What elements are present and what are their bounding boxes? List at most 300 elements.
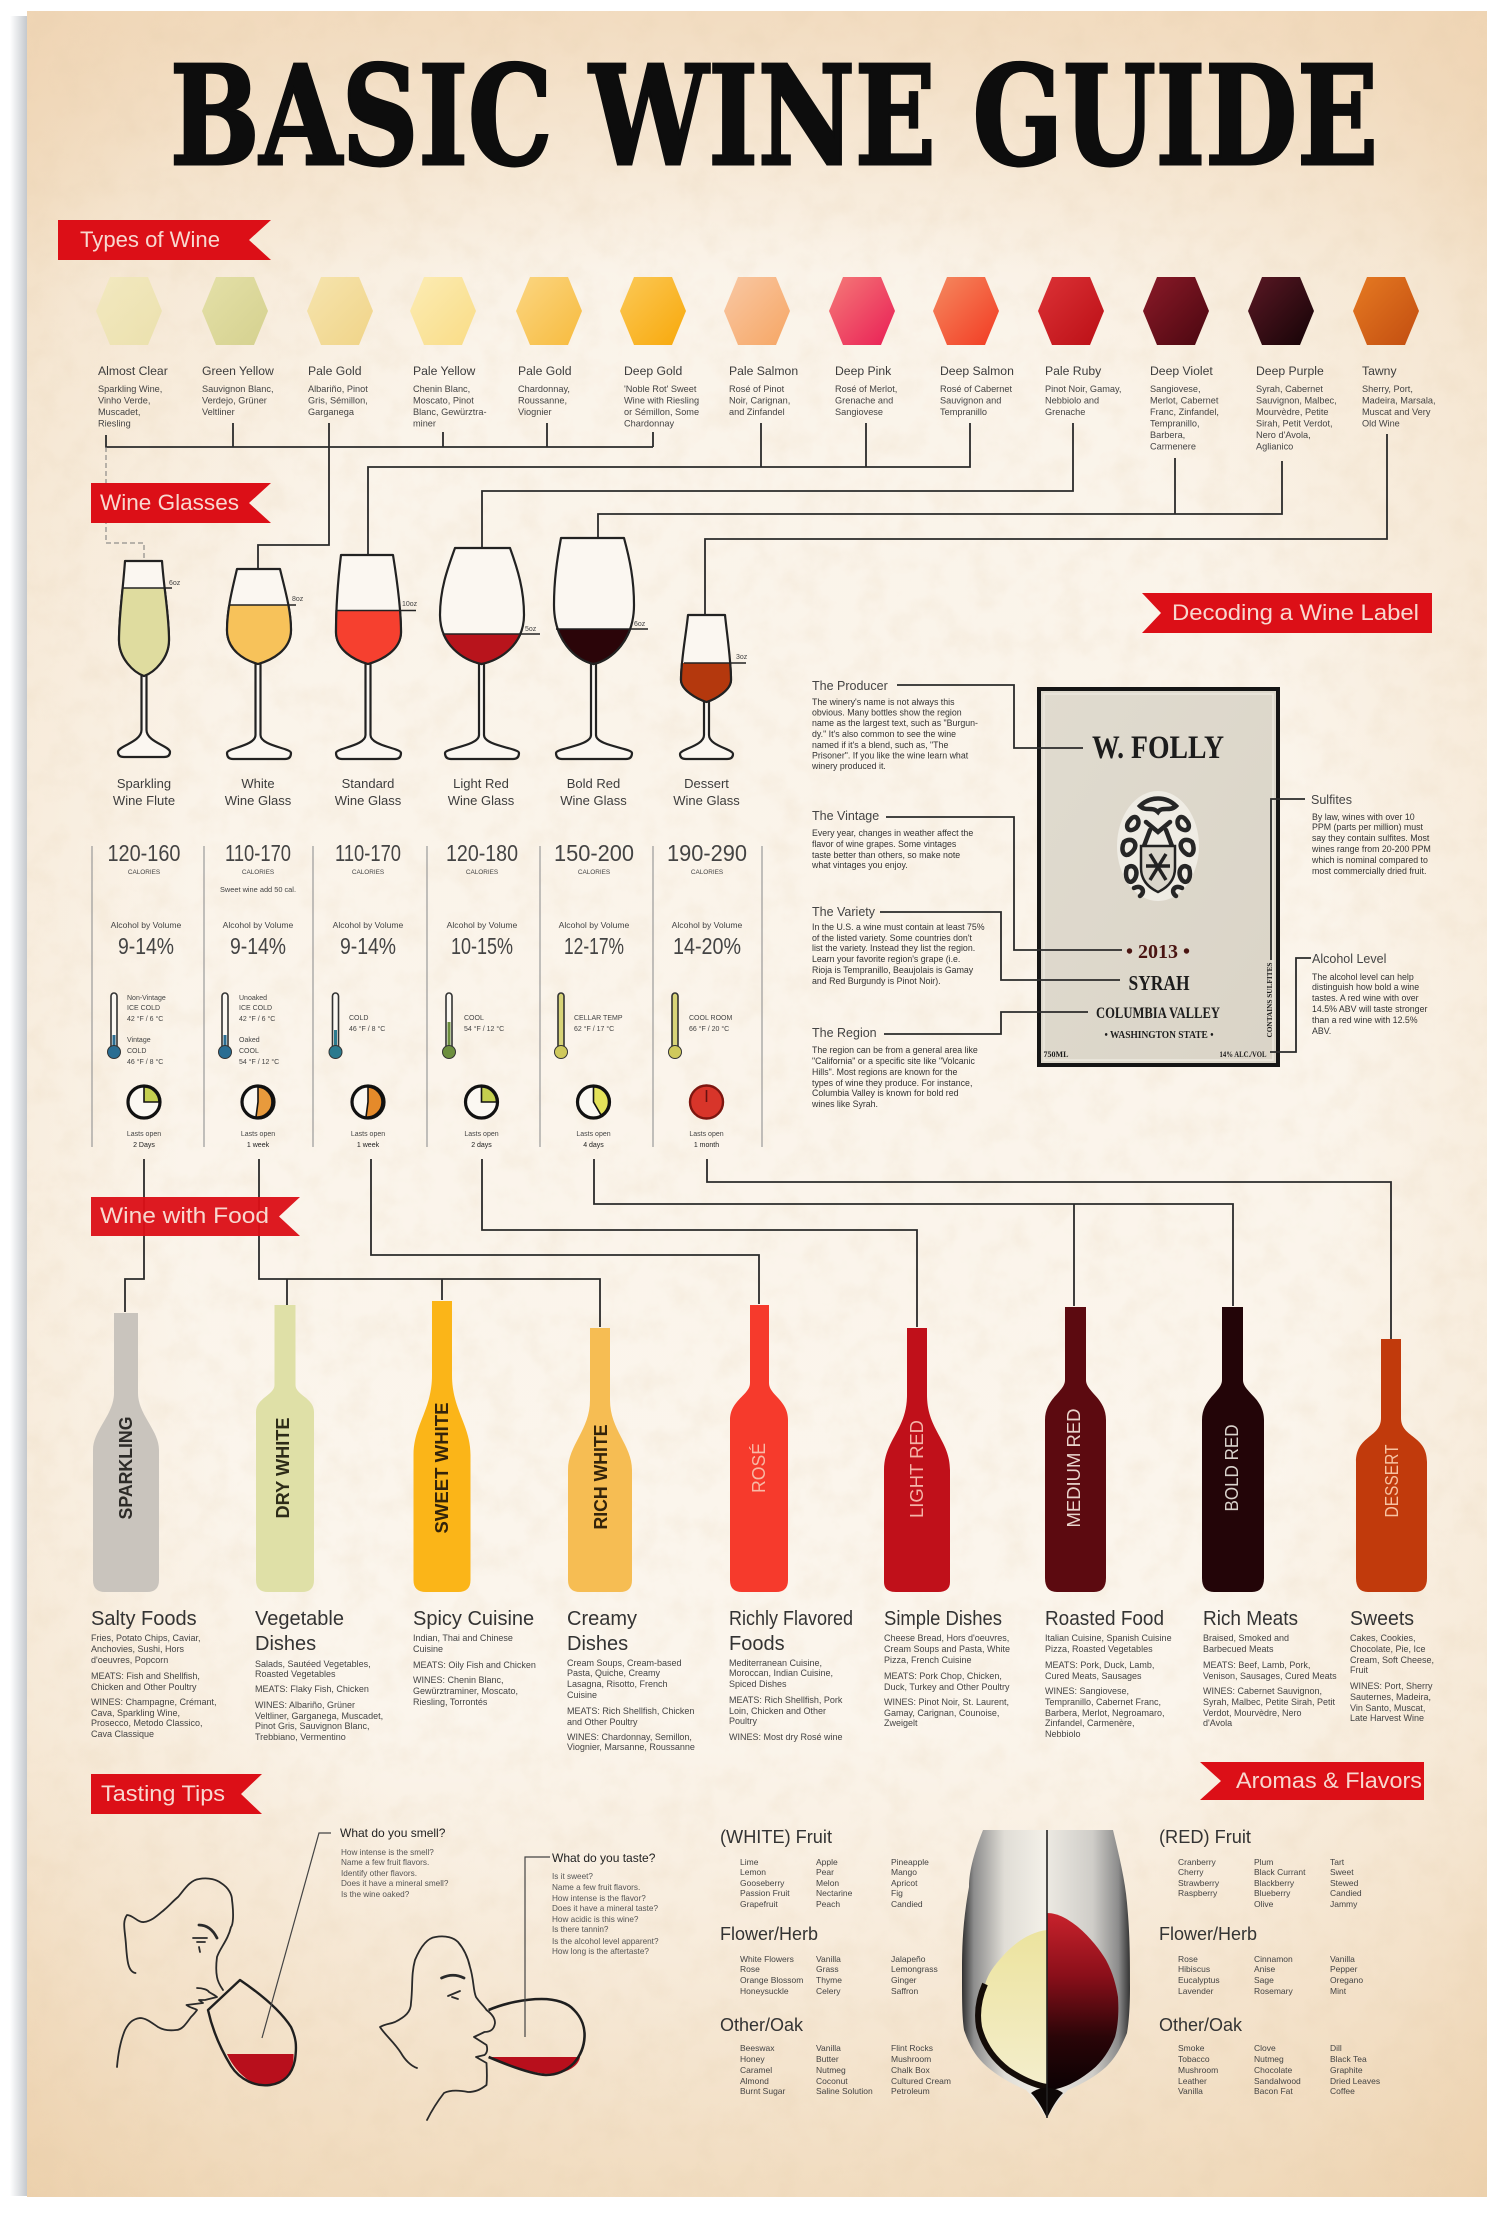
wine colour descriptions: Almost Clear (98, 364, 168, 378)
pairing: simple dishes: Cheese Bread, Hors d'oeuvres, (884, 1633, 1009, 1643)
aroma lists: red wine: Blueberry (1254, 1888, 1291, 1898)
wine colour descriptions: Vinho Verde, (98, 396, 150, 406)
illustration: person smelling wine (117, 1878, 233, 2067)
aroma lists: white wine: Beeswax (740, 2043, 775, 2053)
pairing: creamy dishes: Dishes (567, 1633, 628, 1655)
text: what do you taste: Is there tannin? (552, 1925, 609, 1934)
clocks: how long wine lasts open: 4 days (583, 1142, 604, 1149)
wine colour descriptions: Sangiovese (835, 407, 883, 417)
pairing: sweets: Late Harvest Wine (1350, 1713, 1424, 1723)
pairing: sweets: Chocolate, Pie, Ice (1350, 1644, 1426, 1654)
thermometers: COLD (127, 1048, 146, 1055)
calories figures: CALORIES (242, 869, 274, 876)
aroma lists: white wine: Chalk Box (891, 2065, 930, 2075)
wine label illustration: W. FOLLY (1092, 730, 1224, 766)
text: what do you taste: Is it sweet? (552, 1872, 593, 1881)
pairing: creamy dishes: and Other Poultry (567, 1717, 638, 1727)
wine colour descriptions: Grenache (1045, 407, 1085, 417)
wine colour descriptions: Wine with Riesling (624, 396, 699, 406)
pairing: vegetable dishes: WINES: Albariño, Grüner (255, 1700, 355, 1710)
aroma lists: white wine: Flower/Herb (720, 1924, 818, 1944)
pairing: rich meats: Rich Meats (1203, 1608, 1298, 1630)
aroma lists: white wine: Gooseberry (740, 1878, 785, 1888)
callout: sulfites: Sulfites (1311, 793, 1352, 807)
thermometers: 42 °F / 6 °C (239, 1015, 275, 1023)
aroma lists: red wine: Coffee (1330, 2086, 1355, 2096)
leader line: taste (525, 1857, 550, 2037)
callout: the region: "California" or a specific site like "Volcanic (812, 1056, 975, 1066)
callout: the region: Columbia Valley is known for bold red (812, 1088, 959, 1098)
thermometers: COOL (464, 1015, 484, 1022)
thermometers: 54 °F / 12 °C (464, 1025, 504, 1033)
pairing: simple dishes (884, 1608, 1010, 1728)
thermometers (108, 993, 732, 1066)
banner: tasting tips (91, 1774, 262, 1814)
pairing: salty foods: d'oeuvres, Popcorn (91, 1655, 168, 1665)
bottle: sweet white (414, 1301, 470, 1592)
pairing: spicy cuisine: WINES: Chenin Blanc, (413, 1675, 504, 1685)
callout: alcohol level: The alcohol level can help (1312, 972, 1414, 982)
pairing: rich meats: Verdot, Mourvèdre, Nero (1203, 1708, 1302, 1718)
pairing: salty foods (91, 1608, 217, 1739)
aroma lists: red wine: Oregano (1330, 1975, 1363, 1985)
glass: white wine: 8oz (292, 596, 304, 603)
aroma lists: white wine: Orange Blossom (740, 1975, 803, 1985)
aroma lists: red wine: Plum (1254, 1857, 1273, 1867)
callout: sulfites (1311, 793, 1431, 876)
callout: the variety: Learn your favorite region's grape (i.e. (812, 954, 960, 964)
callout: the vintage: flavor of wine grapes. Some vintages (812, 839, 957, 849)
pairing: rich meats: Venison, Sausages, Cured Meats (1203, 1671, 1337, 1681)
glass names: Standard (342, 776, 394, 791)
glass names: Dessert (684, 776, 729, 791)
banner: wine with food: Wine with Food (100, 1203, 269, 1228)
bottle: sparkling (93, 1313, 159, 1592)
alcohol by volume figures: 9-14% (340, 933, 396, 959)
aroma lists: white wine: Nutmeg (816, 2065, 846, 2075)
aroma lists: red wine: Clove (1254, 2043, 1276, 2053)
bottle: dessert: DESSERT (1382, 1444, 1402, 1518)
alcohol by volume figures: 9-14% (118, 933, 174, 959)
aroma lists: red wine: Smoke (1178, 2043, 1205, 2053)
glass: light red: 5oz (525, 626, 537, 633)
pairing: richly flavored foods: Foods (729, 1633, 785, 1655)
pairing: richly flavored foods: Poultry (729, 1716, 758, 1726)
callout: alcohol level: ABV. (1312, 1026, 1331, 1036)
aroma lists: white wine: Peach (816, 1899, 840, 1909)
glass names: Wine Glass (225, 793, 292, 808)
aroma lists: white wine: Jalapeño (891, 1954, 926, 1964)
wine colour descriptions: Rosé of Merlot, (835, 384, 897, 394)
pairing: salty foods: Cava Classique (91, 1729, 154, 1739)
callout: the region: wines like Syrah. (811, 1099, 878, 1109)
alcohol by volume figures: 12-17% (564, 933, 624, 959)
wine colour descriptions: Pale Yellow (413, 364, 476, 378)
panel: decoding a wine label (811, 593, 1432, 1109)
callout: the producer: name as the largest text, such as "Burgun- (812, 718, 978, 728)
pairing: salty foods: MEATS: Fish and Shellfish, (91, 1671, 200, 1681)
clocks: how long wine lasts open: 1 week (357, 1142, 380, 1149)
alcohol by volume figures: 9-14% (230, 933, 286, 959)
alcohol by volume figures: Alcohol by Volume (447, 920, 518, 930)
text: what do you smell: Does it have a mineral smell? (341, 1879, 449, 1888)
illustration: wine glass tilted to nose (208, 1980, 296, 2085)
pairing: salty foods: Fries, Potato Chips, Caviar, (91, 1633, 201, 1643)
calories figures: 120-160 (108, 840, 180, 866)
aroma lists: red wine: Pepper (1330, 1964, 1358, 1974)
aroma lists: white wine: Almond (740, 2076, 769, 2086)
aroma lists: red wine: Chocolate (1254, 2065, 1293, 2075)
wine colour descriptions: Gris, Sémillon, (308, 396, 368, 406)
callout: the region: types of wine they produce. For instance, (812, 1078, 972, 1088)
callout: alcohol level: Alcohol Level (1312, 952, 1386, 966)
wine label illustration: 14% ALC./VOL (1220, 1050, 1266, 1059)
aroma lists: white wine: Mushroom (891, 2054, 931, 2064)
text: what do you taste: Name a few fruit flavors. (552, 1883, 640, 1892)
pairing: roasted food: Tempranillo, Cabernet Franc, (1045, 1697, 1161, 1707)
callout: the producer: dy." It's also common to see the wine (812, 729, 956, 739)
aroma lists: white wine: (WHITE) Fruit (720, 1827, 832, 1847)
aroma lists: red wine (1159, 1827, 1380, 2096)
aroma lists: white wine: Grass (816, 1964, 839, 1974)
callout: the vintage: what vintages you enjoy. (811, 860, 908, 870)
pairing: spicy cuisine: Cuisine (413, 1644, 443, 1654)
pairing: spicy cuisine (413, 1608, 536, 1707)
pairing: vegetable dishes (255, 1608, 383, 1742)
hexagon swatches (96, 277, 1419, 345)
aroma lists: white wine: White Flowers (740, 1954, 794, 1964)
pairing: roasted food: Roasted Food (1045, 1608, 1164, 1630)
banner: decoding a wine label: Decoding a Wine Label (1172, 600, 1419, 625)
aroma lists: red wine: Stewed (1330, 1878, 1359, 1888)
pairing: simple dishes: Simple Dishes (884, 1608, 1002, 1630)
aroma lists: white wine: Lemongrass (891, 1964, 938, 1974)
pairing: salty foods: Salty Foods (91, 1608, 197, 1630)
pairing: roasted food: Italian Cuisine, Spanish Cuisine (1045, 1633, 1172, 1643)
glass names: Wine Flute (113, 793, 175, 808)
aroma lists: white wine: Ginger (891, 1975, 917, 1985)
aroma lists: red wine: Rosemary (1254, 1986, 1293, 1996)
pairing: roasted food: Nebbiolo (1045, 1729, 1081, 1739)
wine colour descriptions: Blanc, Gewürztra- (413, 407, 487, 417)
callout: alcohol level: distinguish how bold a wine (1312, 982, 1419, 992)
illustration: split wine glass (962, 1830, 1130, 2118)
pairing: vegetable dishes: Roasted Vegetables (255, 1669, 336, 1679)
pairing: creamy dishes (567, 1608, 695, 1752)
aroma lists: white wine: Honeysuckle (740, 1986, 789, 1996)
calories figures: 110-170 (335, 840, 401, 866)
bottle: dry white: DRY WHITE (273, 1418, 293, 1518)
aroma lists: red wine: Cherry (1178, 1867, 1204, 1877)
banner: wine glasses: Wine Glasses (100, 490, 239, 515)
aroma lists: red wine: Cinnamon (1254, 1954, 1293, 1964)
callout: sulfites: say they contain sulfites. Most (1312, 833, 1430, 843)
alcohol by volume figures: Alcohol by Volume (333, 920, 404, 930)
bottle: rich white: RICH WHITE (591, 1424, 611, 1530)
alcohol by volume figures: 10-15% (451, 933, 513, 959)
pairing: vegetable dishes: Salads, Sautéed Vegetables, (255, 1659, 371, 1669)
aroma lists: red wine: Graphite (1330, 2065, 1363, 2075)
pairing: richly flavored foods: Moroccan, Indian Cuisine, (729, 1668, 833, 1678)
banner: decoding a wine label (1142, 593, 1432, 633)
pairing: rich meats: WINES: Cabernet Sauvignon, (1203, 1686, 1322, 1696)
wine colour descriptions: Muscadet, (98, 407, 140, 417)
aroma lists: red wine: Mint (1330, 1986, 1347, 1996)
callout: the variety: list the variety. Instead they list the region. (812, 943, 975, 953)
wine colour descriptions: Tempranillo (940, 407, 987, 417)
aroma lists: white wine: Saline Solution (816, 2086, 873, 2096)
wine colour descriptions: Pale Ruby (1045, 364, 1102, 378)
calories figures: CALORIES (578, 869, 610, 876)
glass: sparkling flute: 6oz (169, 580, 181, 587)
glass: light red (440, 548, 540, 759)
thermometers: Unoaked (239, 995, 267, 1002)
thermometers: Oaked (239, 1037, 260, 1044)
glass: white wine (227, 569, 304, 759)
callout: sulfites: wines range from 20-200 PPM (1311, 844, 1431, 854)
callout: the producer: The winery's name is not always this (812, 697, 955, 707)
wine colour descriptions: Moscato, Pinot (413, 396, 474, 406)
bottle: dry white (256, 1305, 314, 1592)
callout: the variety: Rioja is Tempranillo, Beaujolais is Gamay (812, 965, 974, 975)
wine colour descriptions: Roussanne, (518, 396, 567, 406)
aroma lists: red wine: (RED) Fruit (1159, 1827, 1251, 1847)
aroma lists: white wine: Rose (740, 1964, 760, 1974)
aroma lists: white wine: Saffron (891, 1986, 919, 1996)
panel: types of wine (58, 220, 1436, 452)
wine colour descriptions: Old Wine (1362, 418, 1400, 428)
pairing: richly flavored foods: Richly Flavored (729, 1608, 853, 1630)
aroma lists: red wine: Hibiscus (1178, 1964, 1210, 1974)
pairing: creamy dishes: Pasta, Quiche, Creamy (567, 1668, 661, 1678)
aroma lists: red wine: Anise (1254, 1964, 1276, 1974)
aroma lists: red wine: Tart (1330, 1857, 1345, 1867)
pairing: vegetable dishes: Vegetable (255, 1608, 344, 1630)
aroma lists: white wine: Coconut (816, 2076, 848, 2086)
pairing: sweets (1350, 1608, 1434, 1723)
aroma lists: red wine: Eucalyptus (1178, 1975, 1220, 1985)
pairing: richly flavored foods: WINES: Most dry Rosé wine (729, 1732, 843, 1742)
calories figures: 190-290 (667, 840, 747, 866)
banner: aromas and flavors: Aromas & Flavors (1236, 1768, 1422, 1793)
aroma lists: white wine: Vanilla (816, 2043, 841, 2053)
aroma lists: red wine: Dill (1330, 2043, 1342, 2053)
pairing: richly flavored foods: Mediterranean Cuisine, (729, 1658, 822, 1668)
callout: the producer: The Producer (812, 679, 888, 693)
aroma lists: red wine: Strawberry (1178, 1878, 1220, 1888)
bottle: light red (884, 1328, 950, 1592)
clocks: how long wine lasts open (127, 1086, 724, 1149)
thermometers: Non-Vintage (127, 995, 166, 1002)
aroma lists: white wine (720, 1827, 951, 2096)
pairing: salty foods: Chicken and Other Poultry (91, 1682, 197, 1692)
calories figures: 150-200 (554, 840, 634, 866)
wine colour descriptions: Aglianico (1256, 442, 1293, 452)
callout: the variety: In the U.S. a wine must contain at least 75% (812, 922, 985, 932)
aroma lists: red wine: Nutmeg (1254, 2054, 1284, 2064)
connectors: wine types to glasses (106, 423, 1387, 614)
bottle: rich white (568, 1328, 632, 1592)
glass: bold red (554, 538, 648, 759)
aroma lists: white wine: Melon (816, 1878, 839, 1888)
aroma lists: red wine: Tobacco (1178, 2054, 1210, 2064)
wine colour descriptions: and Zinfandel (729, 407, 785, 417)
banner: types of wine: Types of Wine (80, 227, 220, 252)
aroma lists: white wine: Lemon (740, 1867, 766, 1877)
pairing: simple dishes: Pizza, French Cuisine (884, 1655, 972, 1665)
pairing: simple dishes: MEATS: Pork Chop, Chicken, (884, 1671, 1002, 1681)
text: what do you taste: Is the alcohol level apparent? (552, 1937, 659, 1946)
text: what do you smell (340, 1826, 449, 1899)
wine colour descriptions: Sangiovese, (1150, 384, 1201, 394)
aroma lists: white wine: Thyme (816, 1975, 842, 1985)
thermometers: 46 °F / 8 °C (349, 1025, 385, 1033)
pairing: creamy dishes: WINES: Chardonnay, Semillon, (567, 1732, 692, 1742)
callout: the vintage: The Vintage (812, 809, 879, 823)
aroma lists: red wine: Black Currant (1254, 1867, 1306, 1877)
bottle: light red: LIGHT RED (907, 1420, 927, 1518)
wine colour descriptions: Viognier (518, 407, 552, 417)
callout: alcohol level: than a red wine with 12.5% (1312, 1015, 1418, 1025)
banner: wine with food (91, 1197, 300, 1236)
wine colour descriptions: Deep Salmon (940, 364, 1014, 378)
calories figures: CALORIES (352, 869, 384, 876)
illustration: wine glass at lips (489, 1999, 585, 2075)
pairing: sweets: Sauternes, Madeira, (1350, 1692, 1431, 1702)
callout: the producer: named if it's a blend, such as, "The (812, 740, 948, 750)
alcohol by volume figures: Alcohol by Volume (111, 920, 182, 930)
panel: wine with food (91, 1197, 1434, 1752)
clocks: how long wine lasts open: Lasts open (576, 1131, 611, 1138)
pairing: sweets: Cakes, Cookies, (1350, 1633, 1416, 1643)
text: what do you taste: How intense is the flavor? (552, 1894, 646, 1903)
wine colour descriptions: Rosé of Pinot (729, 384, 785, 394)
wine colour descriptions (98, 364, 1436, 452)
glass names: White (241, 776, 275, 791)
panel: wine glasses (91, 483, 762, 1149)
bottle: medium red: MEDIUM RED (1064, 1408, 1084, 1528)
pairing: sweets: Fruit (1350, 1665, 1368, 1675)
pairing: sweets: WINES: Port, Sherry (1350, 1681, 1433, 1691)
wine colour descriptions: Sirah, Petit Verdot, (1256, 418, 1333, 428)
pairing: simple dishes: Gamay, Carignan, Counoise, (884, 1708, 999, 1718)
pairing: rich meats: Braised, Smoked and (1203, 1633, 1289, 1643)
callout: the producer (811, 679, 978, 771)
alcohol by volume figures (111, 920, 743, 959)
text: what do you taste: How long is the aftertaste? (552, 1947, 649, 1956)
thermometers: COOL (239, 1048, 259, 1055)
calories figures: CALORIES (466, 869, 498, 876)
clocks: how long wine lasts open: Lasts open (351, 1131, 385, 1138)
callout: the region: The Region (812, 1026, 877, 1040)
calories figures: 110-170 (225, 840, 291, 866)
aroma lists: red wine: Vanilla (1330, 1954, 1355, 1964)
wine colour descriptions: Barbera, (1150, 430, 1185, 440)
bottle: sweet white: SWEET WHITE (432, 1402, 452, 1534)
aroma lists: white wine: Fig (891, 1888, 903, 1898)
pairing: roasted food: Pizza, Roasted Vegetables (1045, 1644, 1153, 1654)
pairing: vegetable dishes: Pinot Gris, Sauvignon Blanc, (255, 1721, 370, 1731)
aroma lists: white wine: Vanilla (816, 1954, 841, 1964)
pairing: sweets: Vin Santo, Muscat, (1350, 1703, 1425, 1713)
aroma lists: red wine: Mushroom (1178, 2065, 1218, 2075)
banner: tasting tips: Tasting Tips (101, 1781, 225, 1806)
clocks: how long wine lasts open: Lasts open (464, 1131, 499, 1138)
callout: the vintage (811, 809, 973, 870)
glass names: Wine Glass (673, 793, 740, 808)
text: what do you smell: Is the wine oaked? (341, 1890, 410, 1899)
clocks: how long wine lasts open: Lasts open (689, 1131, 724, 1138)
wine colour descriptions: Deep Gold (624, 364, 682, 378)
clocks: how long wine lasts open: Lasts open (127, 1131, 161, 1138)
callout: the producer: winery produced it. (811, 761, 886, 771)
pairing: richly flavored foods: Loin, Chicken and Other (729, 1706, 826, 1716)
aroma lists: white wine: Nectarine (816, 1888, 853, 1898)
aroma lists: red wine: Jammy (1330, 1899, 1358, 1909)
pairing: vegetable dishes: MEATS: Flaky Fish, Chicken (255, 1684, 369, 1694)
wine colour descriptions: Riesling (98, 418, 131, 428)
aroma lists: red wine: Dried Leaves (1330, 2076, 1380, 2086)
aroma lists: white wine: Mango (891, 1867, 917, 1877)
thermometers: ICE COLD (127, 1005, 160, 1012)
callout: the region: Hills". Most regions are known for the (812, 1067, 958, 1077)
wine colour descriptions: Sauvignon Blanc, (202, 384, 274, 394)
thermometers: 62 °F / 17 °C (574, 1025, 614, 1033)
aroma lists: white wine: Butter (816, 2054, 839, 2064)
glass: standard (336, 555, 418, 759)
wine colour descriptions: Chardonnay, (518, 384, 570, 394)
aroma lists: white wine: Apricot (891, 1878, 918, 1888)
wine colour descriptions: Noir, Carignan, (729, 396, 790, 406)
aroma lists: red wine: Sweet (1330, 1867, 1354, 1877)
pairing: spicy cuisine: Riesling, Torrontés (413, 1697, 488, 1707)
wine colour descriptions: Albariño, Pinot (308, 384, 368, 394)
wine colour descriptions: Madeira, Marsala, (1362, 396, 1436, 406)
aroma lists: red wine: Black Tea (1330, 2054, 1367, 2064)
banner: types of wine (58, 220, 271, 260)
wine colour descriptions: Nebbiolo and (1045, 396, 1099, 406)
wine colour descriptions: Chenin Blanc, (413, 384, 470, 394)
wine colour descriptions: Muscat and Very (1362, 407, 1431, 417)
wine label illustration: CONTAINS SULFITES (1265, 962, 1274, 1038)
icon: family crest (1117, 791, 1199, 901)
wine colour descriptions: 'Noble Rot' Sweet (624, 384, 697, 394)
wine colour descriptions: Nero d'Avola, (1256, 430, 1311, 440)
text: what do you taste (552, 1851, 659, 1956)
pairing: simple dishes: Duck, Turkey and Other Poultry (884, 1682, 1010, 1692)
wine label illustration: COLUMBIA VALLEY (1096, 1005, 1220, 1022)
text: what do you smell: How intense is the smell? (341, 1848, 434, 1857)
aroma lists: red wine: Raspberry (1178, 1888, 1218, 1898)
pairing: sweets: Cream, Soft Cheese, (1350, 1655, 1434, 1665)
thermometers: COOL ROOM (689, 1015, 732, 1022)
aroma lists: red wine: Candied (1330, 1888, 1362, 1898)
wine label illustration: SYRAH (1128, 971, 1190, 995)
alcohol by volume figures: Alcohol by Volume (223, 920, 294, 930)
bottle: bold red: BOLD RED (1222, 1424, 1242, 1512)
banner: aromas and flavors (1200, 1762, 1424, 1800)
bottle: bold red (1202, 1307, 1264, 1592)
wine colour descriptions: Green Yellow (202, 364, 274, 378)
wine colour descriptions: or Sémillon, Some (624, 407, 699, 417)
pairing: roasted food: Zinfandel, Carmenère, (1045, 1718, 1135, 1728)
aroma lists: white wine: Caramel (740, 2065, 772, 2075)
clocks: how long wine lasts open: 1 month (694, 1142, 719, 1149)
glass: bold red: 6oz (634, 621, 646, 628)
text: what do you smell: Name a few fruit flavors. (341, 1858, 429, 1867)
aroma lists: red wine: Rose (1178, 1954, 1198, 1964)
aroma lists: white wine: Other/Oak (720, 2015, 804, 2035)
